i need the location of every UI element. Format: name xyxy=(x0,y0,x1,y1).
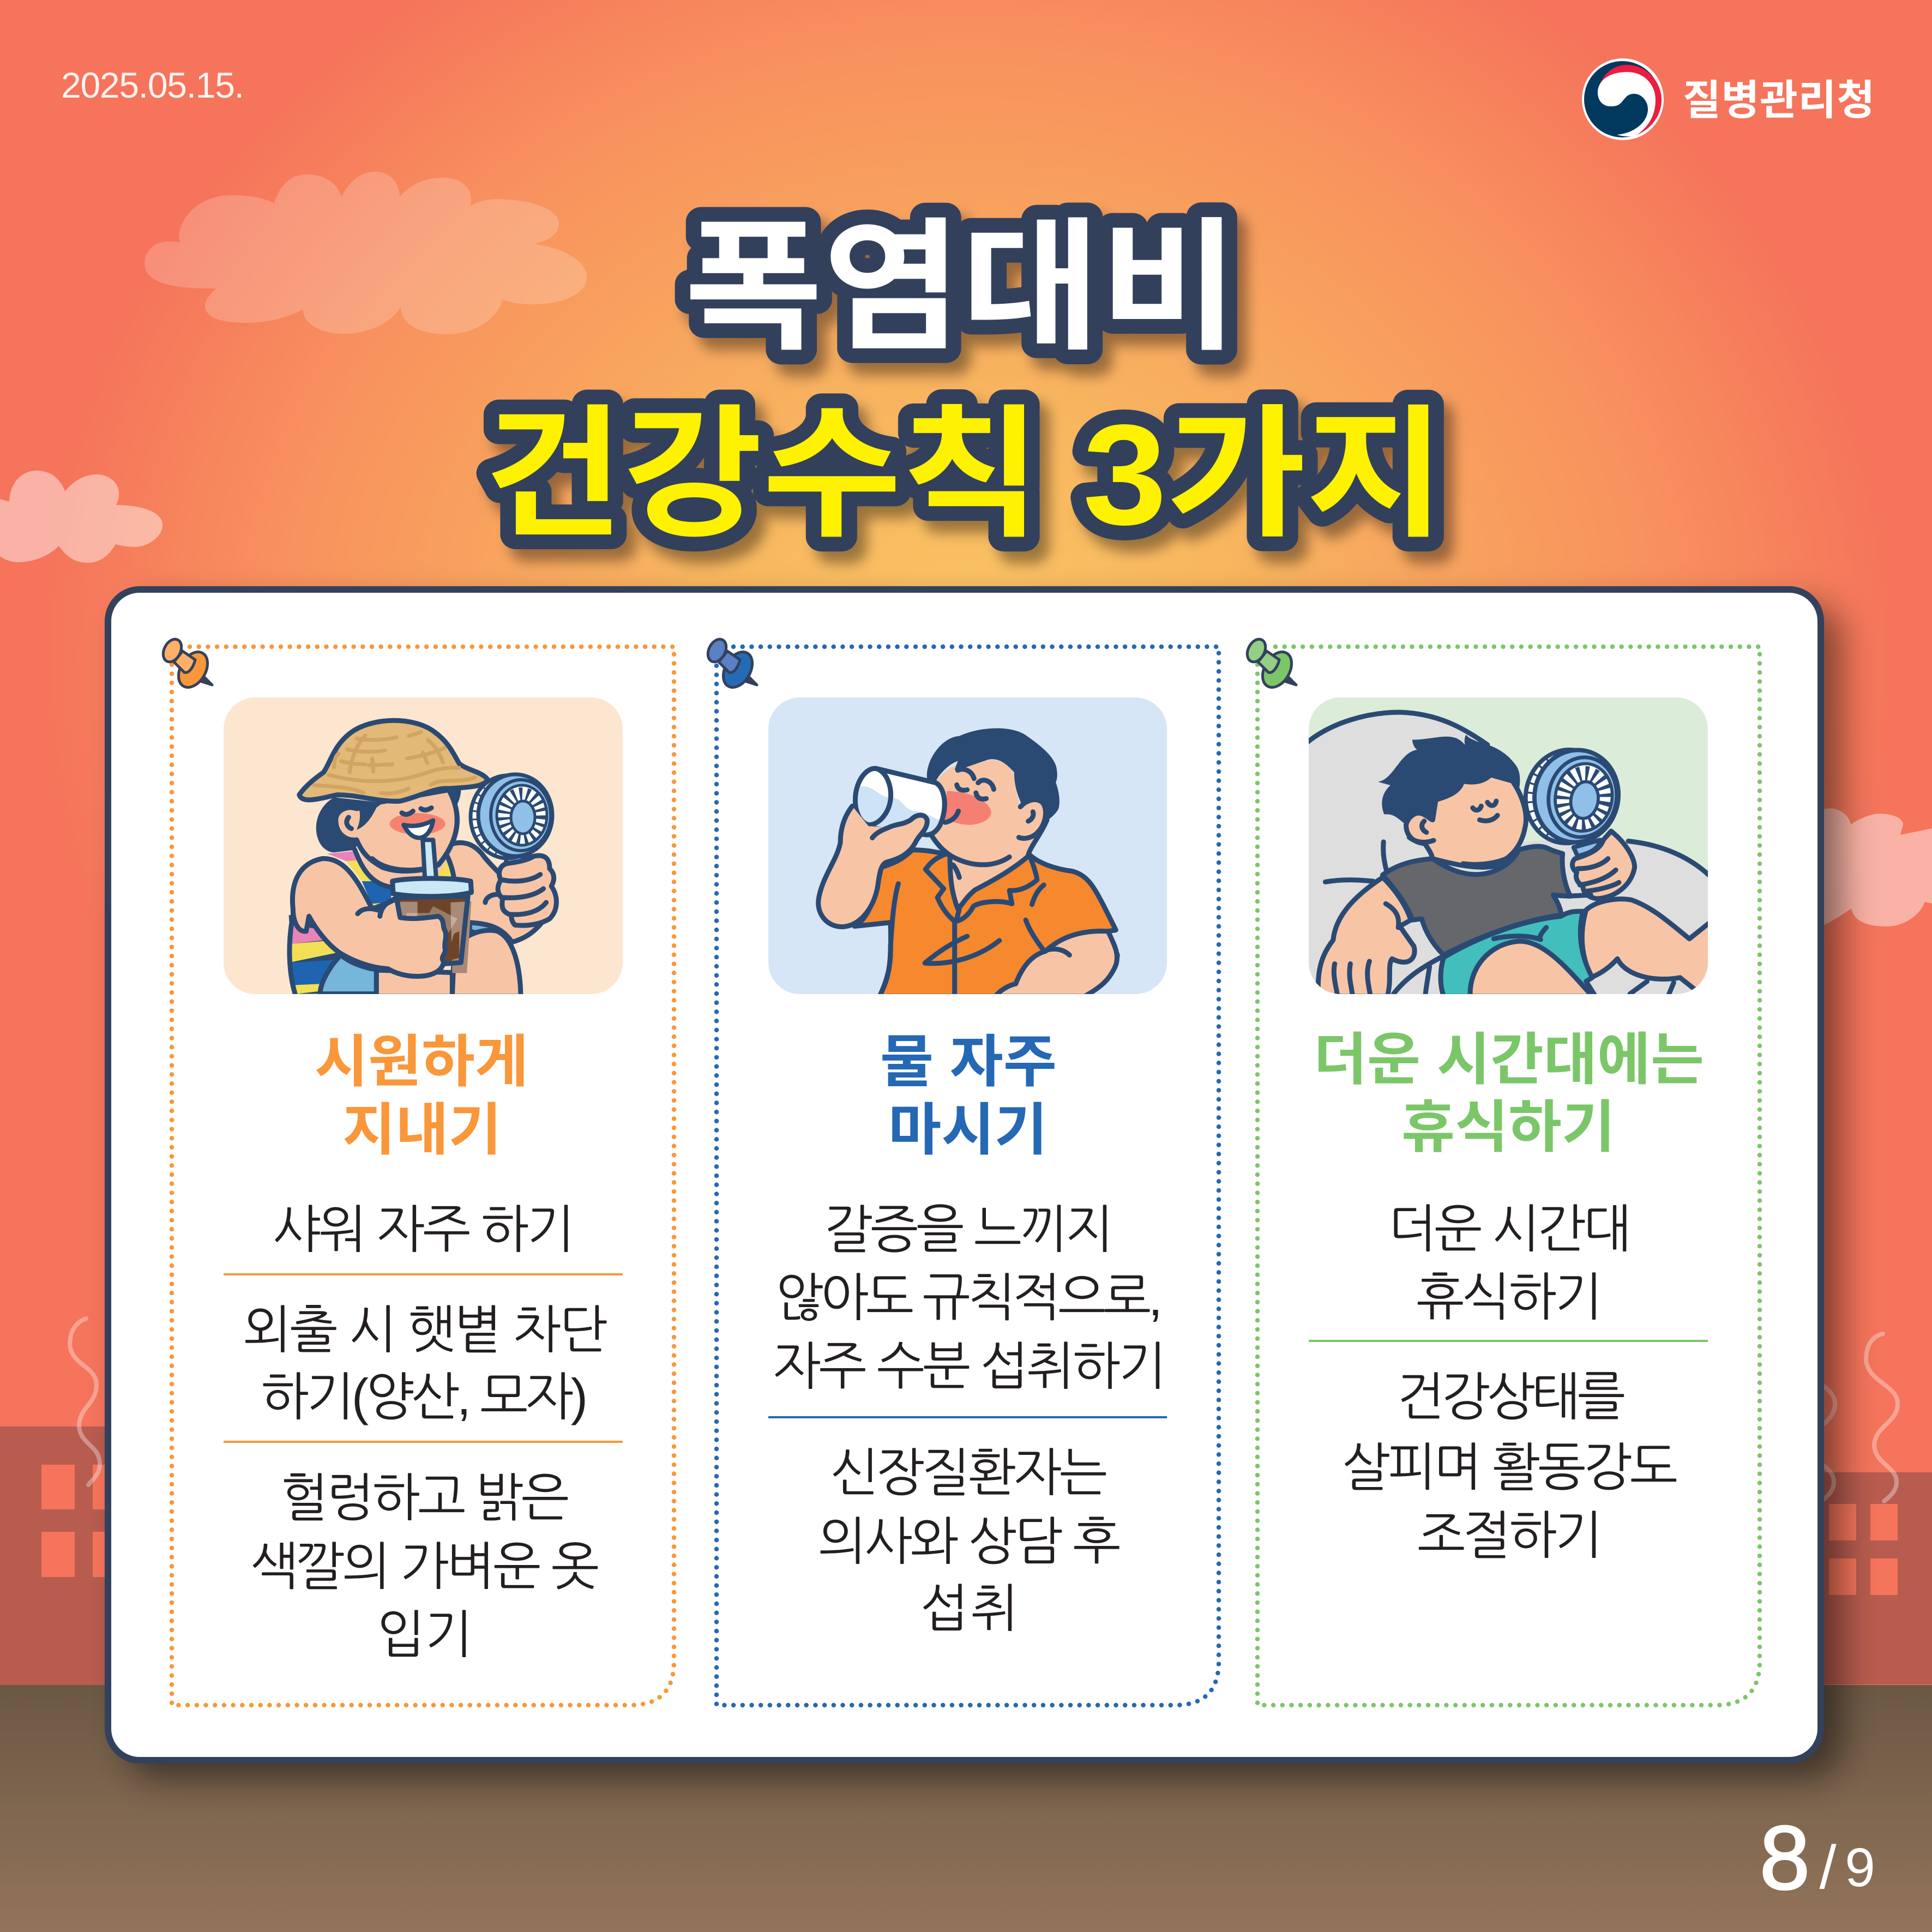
text: tip 1 xyxy=(1388,1200,1632,1326)
divider xyxy=(768,1416,1167,1418)
cloud: upper left xyxy=(145,172,587,334)
text: tip 2: 건강상태를 xyxy=(1397,1368,1626,1425)
heading: 휴식하기 xyxy=(1401,1096,1615,1159)
heat wave: right behind card xyxy=(1803,1334,1835,1501)
text: tip 3: 색깔의 가벼운 옷 xyxy=(250,1538,599,1595)
heading xyxy=(880,1031,1057,1162)
illustration: cooling off with fan and iced drink xyxy=(224,697,623,996)
divider xyxy=(224,1441,623,1443)
text: tip 1 xyxy=(773,1201,1166,1395)
dotted frame green xyxy=(1257,647,1760,1705)
divider xyxy=(1309,1340,1708,1342)
icon: green push pin xyxy=(1244,636,1297,693)
text: tip 2: 섭취 xyxy=(920,1580,1019,1637)
icon: hand fan xyxy=(1518,742,1626,851)
text: tip 1: 샤워 자주 하기 xyxy=(273,1201,575,1258)
text: tip 2: 살피며 활동강도 xyxy=(1342,1439,1678,1496)
main card xyxy=(108,589,1821,1760)
divider xyxy=(224,1273,623,1275)
text: tip 2 xyxy=(243,1301,607,1425)
panel: 더운 시간대에는 휴식하기 xyxy=(1244,636,1760,1705)
date: 2025.05.15. xyxy=(61,65,244,105)
text: tip 1: 않아도 규칙적으로, xyxy=(775,1269,1163,1326)
text: tip 2 xyxy=(1342,1368,1678,1564)
illustration: man resting on sofa with fan xyxy=(1306,697,1711,996)
logo: 질병관리청 xyxy=(1582,58,1875,140)
heading xyxy=(315,1031,528,1162)
icon: taegeuk emblem xyxy=(1582,58,1664,140)
title line 1: 폭염대비 xyxy=(684,208,1238,368)
dotted frame orange xyxy=(172,647,674,1705)
text: tip 3 xyxy=(250,1469,599,1663)
icon: hand fan xyxy=(471,774,552,858)
panel: 물 자주 마시기 xyxy=(705,636,1219,1705)
building windows right xyxy=(1829,1504,1898,1595)
panel: 시원하게 지내기 xyxy=(160,636,674,1705)
text: tip 1: 휴식하기 xyxy=(1416,1268,1603,1326)
heading: 시원하게 xyxy=(315,1031,528,1094)
heat wave: left xyxy=(70,1319,100,1485)
text: tip 1: 자주 수분 섭취하기 xyxy=(773,1338,1166,1395)
heading: 더운 시간대에는 xyxy=(1314,1028,1704,1092)
title xyxy=(484,208,1445,555)
page number xyxy=(1760,1808,1875,1909)
agency name: 질병관리청 xyxy=(1683,77,1875,124)
text: tip 3: 헐렁하고 밝은 xyxy=(280,1469,569,1526)
page number: / xyxy=(1819,1833,1837,1901)
text: tip 3: 입기 xyxy=(377,1606,473,1663)
text: tip 2: 신장질환자는 xyxy=(830,1444,1108,1501)
text: tip 2: 의사와 상담 후 xyxy=(818,1513,1121,1570)
dotted frame blue xyxy=(717,647,1219,1705)
text: tip 1: 더운 시간대 xyxy=(1388,1200,1632,1257)
heading: 지내기 xyxy=(342,1099,502,1162)
page number: 8 xyxy=(1760,1808,1810,1909)
title line 2: 건강수칙 3가지 xyxy=(484,395,1445,555)
text: tip 2 xyxy=(818,1444,1121,1637)
text: tip 2: 외출 시 햇볕 차단 xyxy=(243,1301,607,1358)
text: tip 1: 갈증을 느끼지 xyxy=(824,1201,1114,1258)
illustration: man drinking water xyxy=(768,697,1167,996)
card shadow xyxy=(127,605,1841,1778)
heading: 마시기 xyxy=(888,1099,1048,1162)
building: left xyxy=(0,1427,115,1685)
page number: 9 xyxy=(1845,1837,1875,1898)
heading: 물 자주 xyxy=(880,1031,1057,1094)
heading xyxy=(1314,1028,1704,1159)
text: tip 2: 하기(양산, 모자) xyxy=(261,1368,588,1425)
cloud: right edge xyxy=(1799,808,1932,927)
icon: orange push pin xyxy=(160,636,213,693)
icon: blue push pin xyxy=(705,636,758,693)
building: right xyxy=(1799,1472,1932,1684)
building windows left xyxy=(41,1465,115,1577)
heat wave: right xyxy=(1866,1334,1898,1501)
ground xyxy=(0,1685,1932,1932)
text: tip 2: 조절하기 xyxy=(1417,1507,1603,1564)
cloud: left edge xyxy=(0,471,162,563)
